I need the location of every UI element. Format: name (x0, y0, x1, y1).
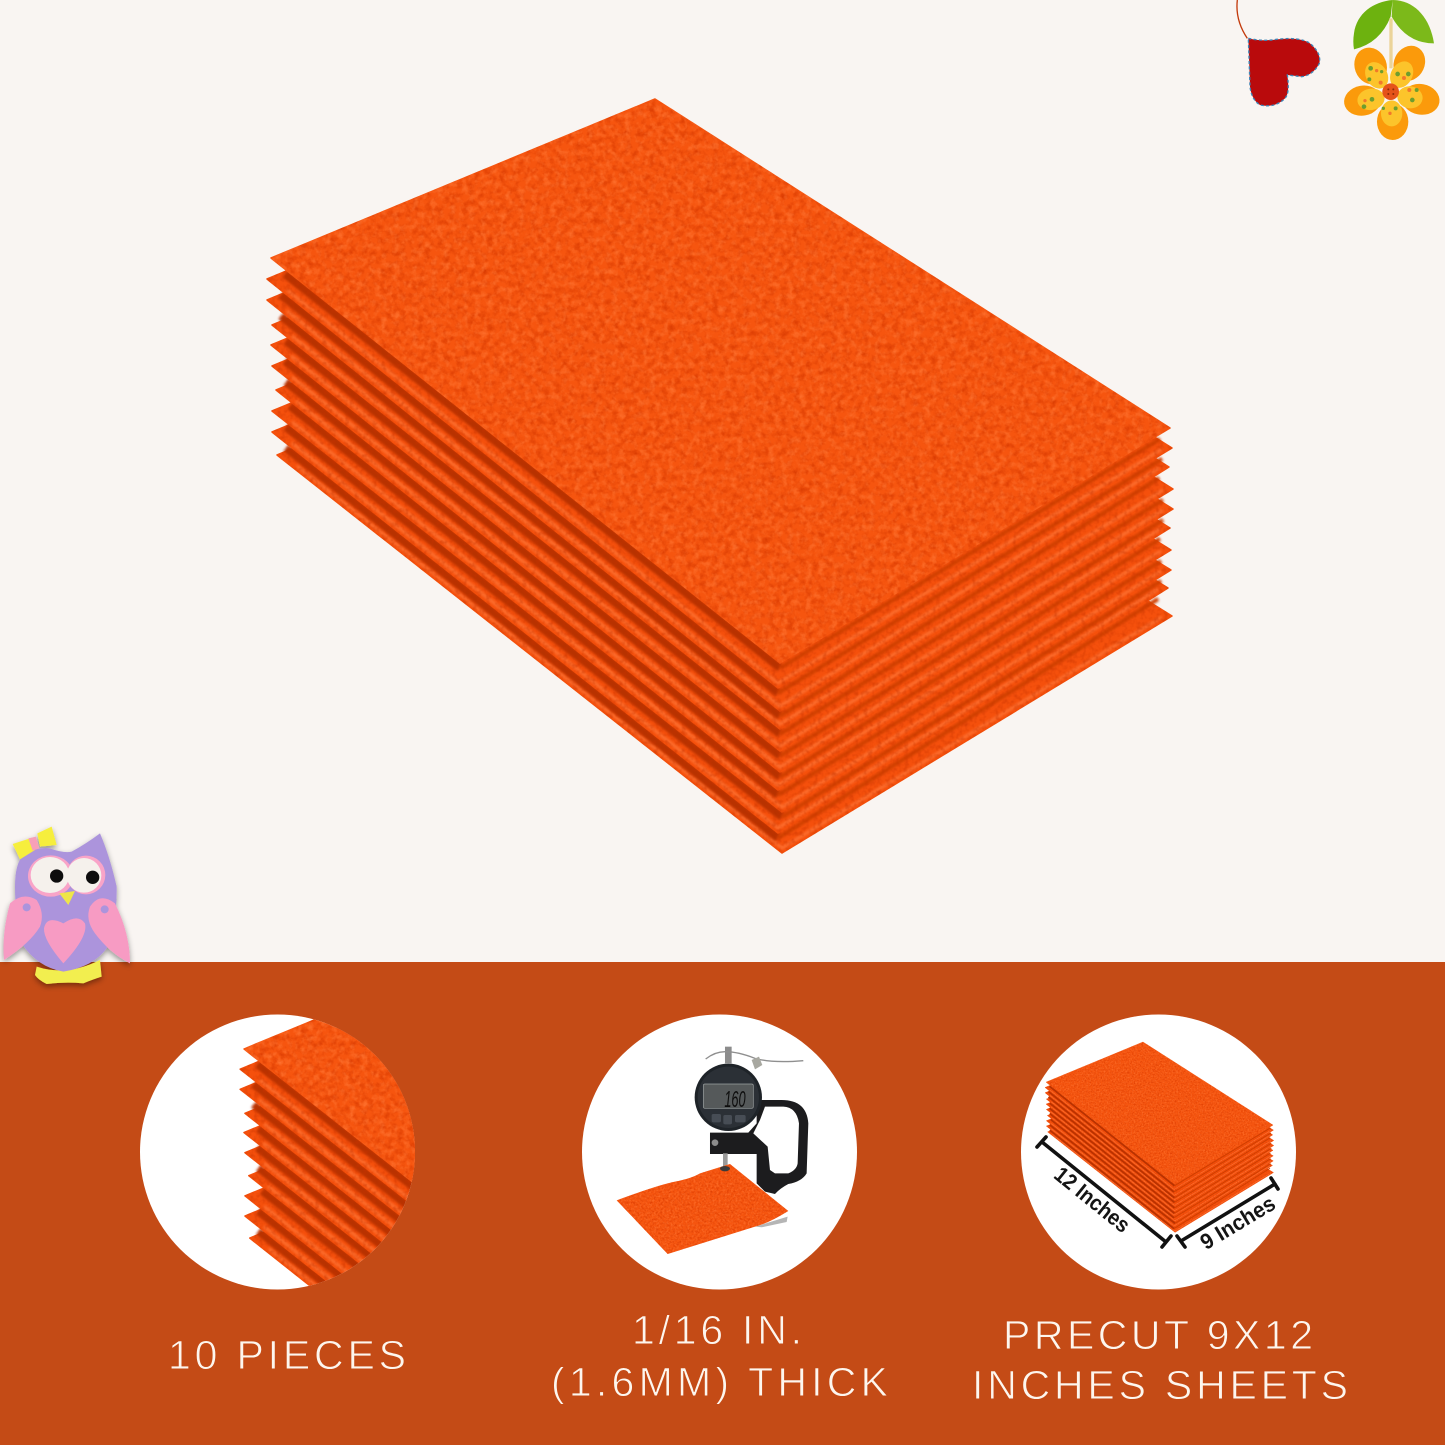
caption: thickness: (1.6MM) THICK (551, 1359, 888, 1405)
dimension: 9 inches: 9 Inches (1196, 1190, 1280, 1255)
panel: 10 pieces circle (140, 1014, 415, 1290)
caption: sheet size (972, 1312, 1348, 1408)
icon: felt flower ornament (1342, 0, 1442, 140)
caption: 10 pieces: 10 PIECES (168, 1332, 406, 1378)
caption: thickness: 1/16 IN. (632, 1307, 802, 1353)
dimension: 12 inches (1037, 1137, 1171, 1247)
caption: thickness (551, 1307, 888, 1405)
dimension: 12 inches: 12 Inches (1049, 1162, 1135, 1238)
icon: thickness gauge: 160 (724, 1086, 746, 1112)
bottom band (0, 962, 1445, 1445)
small felt stack (1045, 1042, 1274, 1232)
icon: felt heart ornament (1237, 0, 1320, 106)
dimension: 9 inches (1177, 1178, 1280, 1255)
panel: dimensions circle (1021, 1014, 1296, 1290)
icon: thickness gauge (617, 1047, 808, 1254)
caption: sheet size: INCHES SHEETS (972, 1362, 1348, 1408)
panel: thickness gauge circle (582, 1014, 857, 1290)
icon: felt owl (3, 827, 130, 984)
main felt sheet stack (267, 99, 1173, 853)
cropped stack close-up (239, 1020, 415, 1286)
caption: sheet size: PRECUT 9X12 (1003, 1312, 1313, 1358)
